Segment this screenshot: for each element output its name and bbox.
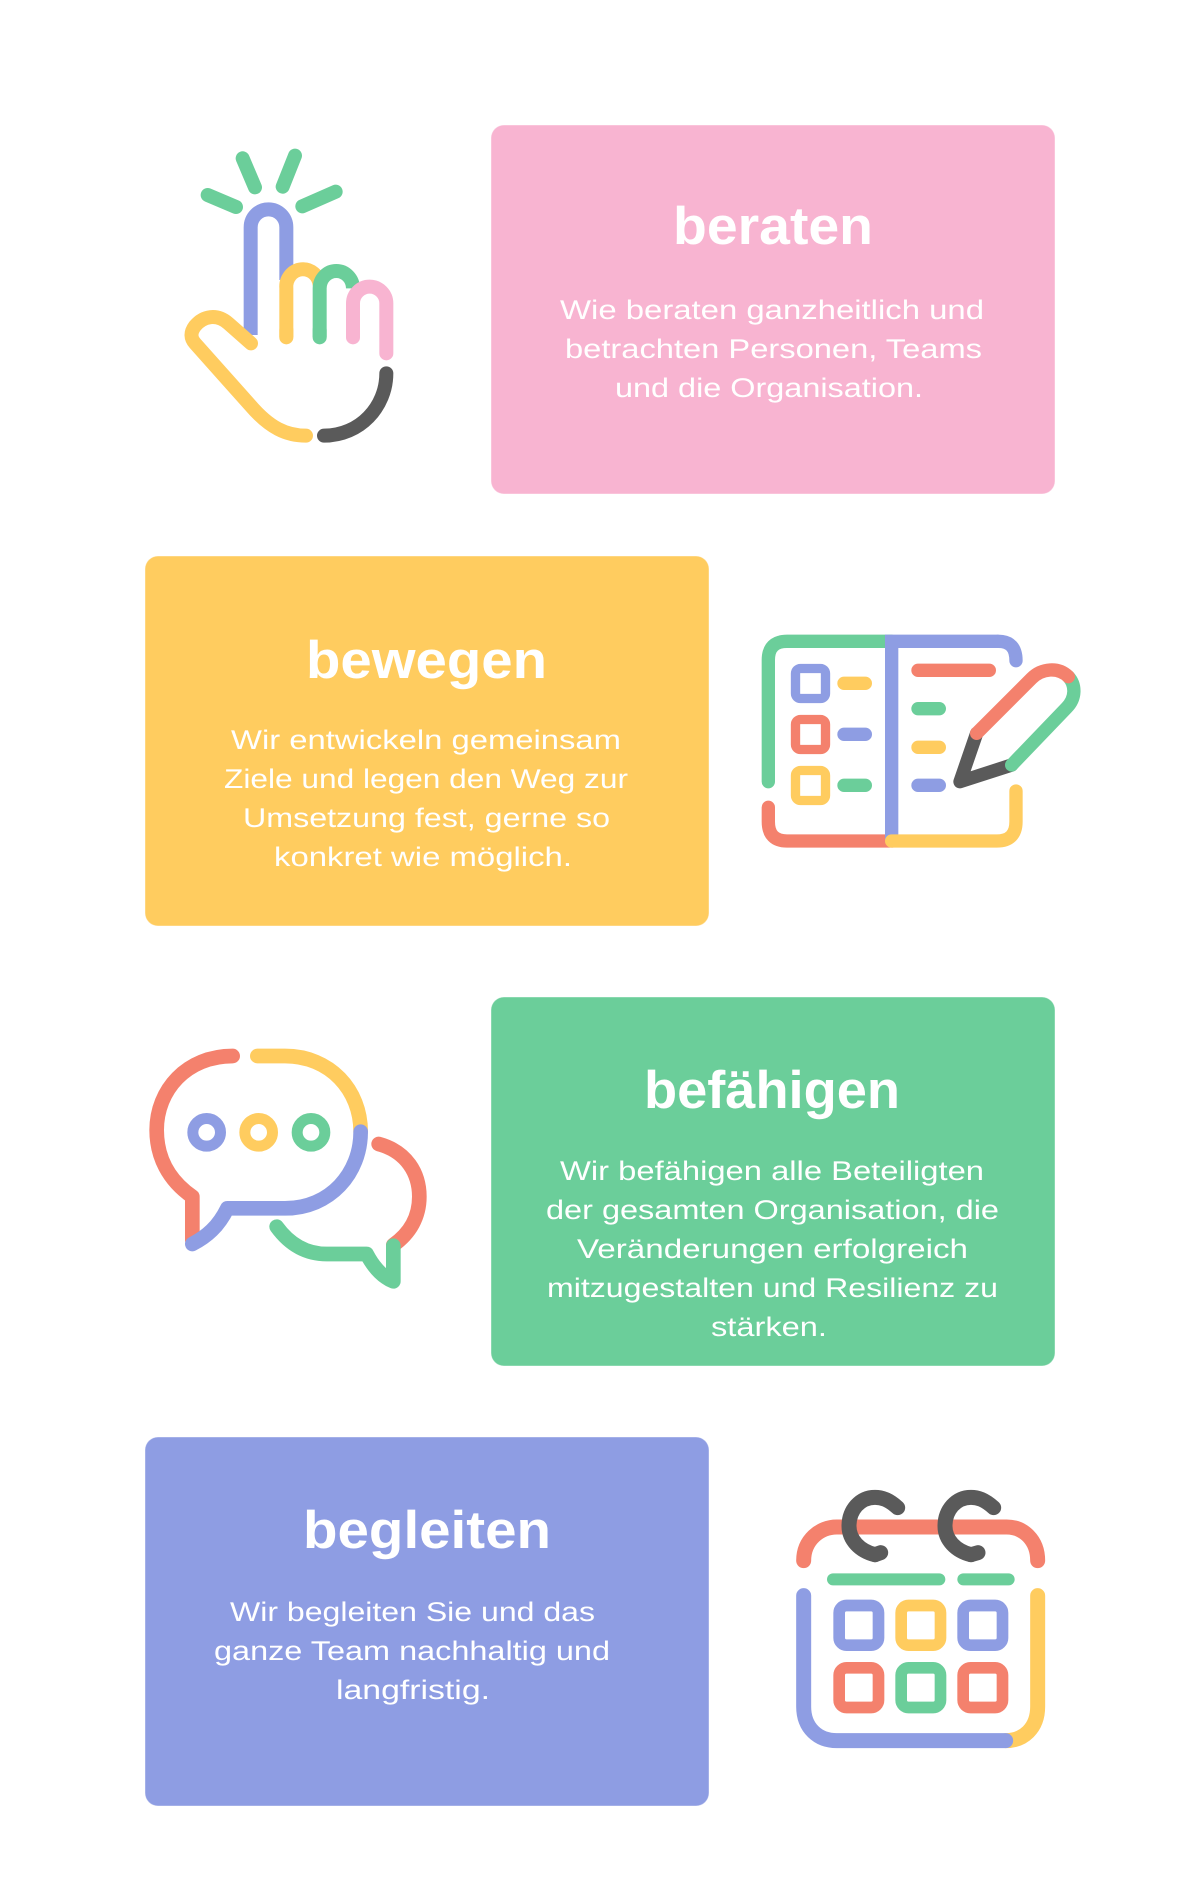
- heading: begleiten: begleiten: [303, 1501, 551, 1560]
- panel: bewegen: [145, 556, 709, 926]
- text block: befähigen: der gesamten Organisation, die: [546, 1195, 999, 1225]
- icon part: notebook frame: [768, 641, 1016, 841]
- text block: begleiten: Wir begleiten Sie und das: [230, 1597, 595, 1627]
- panel: beraten: [491, 125, 1055, 494]
- heading: befähigen: befähigen: [644, 1061, 900, 1120]
- text block: begleiten: ganze Team nachhaltig und: [214, 1636, 610, 1666]
- icon part: calendar body: [804, 1596, 1038, 1741]
- text block: beraten: und die Organisation.: [615, 373, 923, 403]
- icon part: click rays: [208, 156, 336, 207]
- text block: beraten: [560, 295, 984, 403]
- text block: befähigen: [546, 1156, 999, 1342]
- icon: calendar: [804, 1497, 1038, 1741]
- icon: pointing hand: [191, 156, 386, 436]
- icon part: dots: [193, 1118, 325, 1146]
- icon part: checkboxes: [795, 668, 825, 800]
- text block: beraten: Wie beraten ganzheitlich und: [560, 295, 984, 325]
- text block: befähigen: Veränderungen erfolgreich: [577, 1234, 968, 1264]
- text block: befähigen: stärken.: [711, 1312, 827, 1342]
- icon part: palm: [191, 317, 386, 436]
- icon part: date grid: [839, 1605, 1002, 1707]
- icon part: fingers: [251, 209, 386, 353]
- icon part: list lines: [844, 670, 989, 785]
- text block: beraten: betrachten Personen, Teams: [565, 334, 982, 364]
- icon part: small bubble: [277, 1144, 419, 1281]
- icon: checklist with pencil: [768, 641, 1074, 841]
- icon part: binder rings: [849, 1497, 994, 1555]
- panel: begleiten: [145, 1437, 709, 1806]
- heading: beraten: beraten: [673, 197, 873, 256]
- icon part: pencil: [960, 670, 1074, 782]
- icon part: header bars: [833, 1561, 1009, 1597]
- heading: bewegen: bewegen: [306, 631, 547, 690]
- text block: bewegen: Wir entwickeln gemeinsam: [231, 725, 621, 755]
- icon part: large bubble: [157, 1056, 361, 1244]
- text block: begleiten: [214, 1597, 610, 1705]
- text block: bewegen: Umsetzung fest, gerne so: [243, 803, 610, 833]
- text block: bewegen: [224, 725, 628, 872]
- icon: speech bubbles: [157, 1056, 419, 1281]
- text block: begleiten: langfristig.: [336, 1675, 490, 1705]
- text block: befähigen: Wir befähigen alle Beteiligten: [560, 1156, 984, 1186]
- text block: befähigen: mitzugestalten und Resilienz zu: [547, 1273, 998, 1303]
- text block: bewegen: Ziele und legen den Weg zur: [224, 764, 628, 794]
- panel: befähigen: [491, 997, 1055, 1366]
- text block: bewegen: konkret wie möglich.: [274, 842, 572, 872]
- icon part: calendar top: [804, 1527, 1038, 1561]
